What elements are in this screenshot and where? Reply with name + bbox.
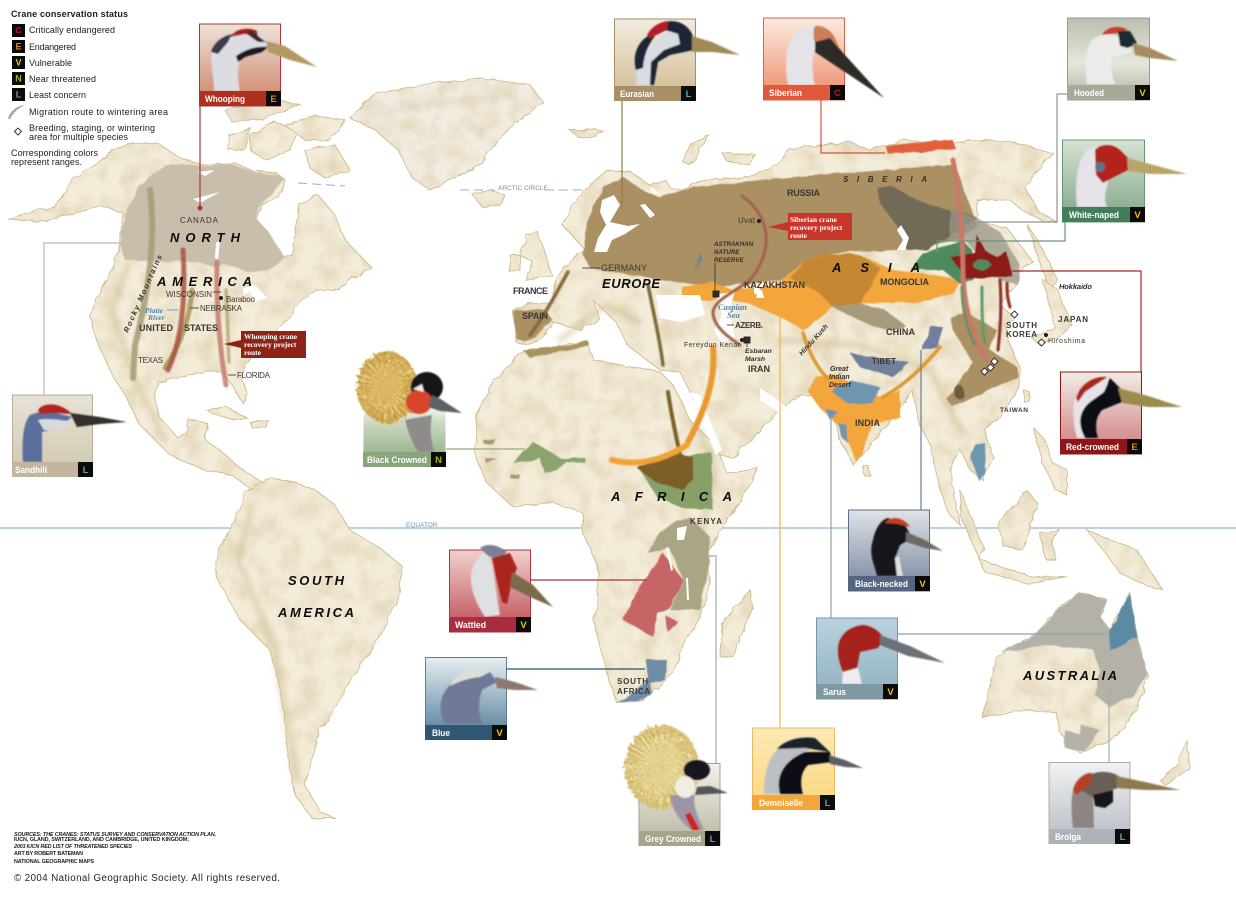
continent: North America: AMERICA [156, 274, 252, 289]
terrain shading [112, 95, 960, 780]
physical labels: Volga [693, 252, 704, 270]
route: white-naped [982, 287, 985, 343]
card: white-naped crane: V [1134, 210, 1141, 221]
card: whooping crane [199, 24, 317, 106]
route: red-crowned Korea [1007, 283, 1010, 307]
range: blue north-east Australia [1110, 593, 1137, 650]
callout: whooping crane recovery project route: recovery project [244, 340, 297, 349]
physical labels: Indian [829, 374, 850, 381]
legend: least concern [12, 88, 86, 101]
physical labels: Esbaran [745, 348, 772, 355]
card: whooping crane: E [270, 94, 277, 105]
country labels: Hokkaido [1059, 282, 1092, 291]
country labels: RUSSIA [787, 188, 820, 198]
range: grey crowned [647, 517, 710, 610]
country labels: CANADA [180, 216, 219, 225]
physical labels [122, 241, 851, 389]
country labels: JAPAN [1058, 315, 1088, 324]
arctic circle line: ARCTIC CIRCLE [498, 185, 549, 192]
country labels: AZERB. [735, 321, 763, 330]
whooping anchor dot [198, 206, 202, 210]
physical labels: NATURE [714, 249, 740, 256]
legend note: represent ranges. [11, 157, 82, 167]
marker: Uvat [757, 219, 761, 223]
Sulawesi [1040, 530, 1060, 560]
place labels [122, 175, 1117, 696]
country labels: Hiroshima [1048, 338, 1085, 345]
range: black crowned east [640, 452, 713, 510]
range: brown mongolia-china [830, 303, 905, 332]
connector: blue [507, 668, 645, 670]
card: black crowned crane: Black Crowned [367, 455, 427, 466]
connector: siberian [821, 100, 885, 153]
card: siberian crane: Siberian [769, 88, 802, 99]
card: wattled crane: Wattled [455, 620, 486, 631]
card: white-naped crane: White-naped [1069, 210, 1119, 221]
card: sandhill crane [12, 395, 127, 477]
Iceland [473, 190, 505, 207]
route: demoiselle west [688, 348, 713, 442]
range: white-naped [910, 240, 975, 284]
range: hooded [877, 187, 977, 250]
callout: siberian crane recovery project route: Siberian crane [790, 215, 838, 224]
card: black-necked crane [848, 510, 943, 591]
route: red-crowned wintering [998, 280, 1001, 350]
card: siberian crane: C [834, 88, 841, 99]
card: grey crowned crane: L [710, 834, 716, 845]
physical labels: Great [830, 366, 849, 373]
country labels: TAIWAN [1000, 407, 1028, 414]
sources [13, 832, 216, 865]
Madagascar [720, 590, 753, 657]
legend: least concern: Least concern [29, 90, 86, 100]
route: eurasian spain [530, 272, 568, 335]
route: demoiselle hindu kush [803, 333, 827, 378]
physical labels: RESERVE [714, 257, 744, 264]
connector: hooded [977, 94, 1067, 222]
country labels: NEBRASKA [200, 304, 243, 313]
connector: demoiselle [779, 315, 781, 728]
range: black crowned small [483, 438, 520, 479]
connector: black crowned [446, 448, 525, 450]
range: red-crowned [950, 235, 1013, 280]
card: hooded crane: Hooded [1074, 88, 1104, 99]
card: brolga [1049, 762, 1180, 844]
range: siberian [885, 140, 955, 153]
range: wattled [623, 553, 683, 637]
card: brolga: L [1120, 832, 1126, 843]
Java [980, 560, 1067, 584]
connector: brolga [1108, 690, 1110, 762]
legend: endangered: Endangered [29, 42, 76, 52]
card: siberian crane [763, 18, 884, 100]
route: hooded east [962, 287, 975, 345]
route: siberian east [953, 160, 987, 360]
country labels: CHINA [886, 327, 916, 337]
range: sarus [832, 380, 880, 403]
legend: vulnerable: Vulnerable [29, 58, 72, 68]
country labels: KOREA [1006, 330, 1037, 339]
card: black crowned crane: N [435, 455, 442, 466]
connector: wattled [531, 579, 647, 581]
physical labels: Platte [145, 306, 164, 315]
country labels: FLORIDA [237, 371, 271, 380]
New Zealand [1160, 740, 1190, 785]
route: whooping wild [168, 250, 184, 370]
marker: Fereydun Kenar [740, 338, 744, 342]
country labels: UNITED [139, 323, 174, 333]
card: blue crane: V [496, 728, 503, 739]
continent: Asia: ASIA [831, 260, 920, 275]
country labels: FRANCE [513, 286, 548, 296]
range: red-crowned centre [973, 260, 991, 270]
card: red-crowned crane [1060, 372, 1182, 454]
route: sandhill central [165, 290, 192, 368]
continent: South America: SOUTH [288, 573, 345, 588]
route: demoiselle east India [883, 347, 940, 397]
Taiwan [1024, 390, 1030, 403]
arctic circle line [298, 183, 585, 192]
Arctic islands [250, 122, 300, 160]
callout: whooping crane recovery project route: route [244, 348, 262, 357]
country labels: WISCONSIN [166, 290, 212, 299]
continent: North America [156, 230, 252, 289]
route: demoiselle africa [612, 445, 687, 463]
card: demoiselle crane [752, 728, 863, 810]
connector: sandhill [44, 243, 122, 394]
card: sarus crane: Sarus [823, 687, 846, 698]
range: black-necked east [922, 327, 943, 350]
Sri Lanka [863, 465, 870, 476]
legend: migration route [8, 105, 168, 119]
card: wattled crane [449, 545, 553, 632]
marker: Esbaran [744, 337, 750, 343]
physical labels: Caspian [718, 302, 747, 312]
connector: white-naped [937, 222, 1065, 253]
card: sandhill crane: L [83, 465, 89, 476]
callout: siberian crane recovery project route [768, 213, 852, 240]
route: sandhill east [226, 290, 229, 362]
country labels: TEXAS [138, 356, 163, 365]
legend: vulnerable [12, 56, 72, 69]
country labels: TIBET [872, 357, 896, 366]
marker: Baraboo [219, 296, 223, 300]
markers [219, 219, 1048, 375]
country labels: KAZAKHSTAN [744, 280, 805, 290]
range: demoiselle overlap [790, 253, 880, 307]
region: Siberia: SIBERIA [843, 175, 927, 184]
card: eurasian crane: L [686, 89, 692, 100]
card: red-crowned crane: E [1131, 442, 1138, 453]
range: brolga south [1065, 725, 1100, 752]
sources: ART BY ROBERT BATEMAN [14, 851, 83, 857]
range: india demoiselle [807, 375, 900, 463]
card: blue crane [425, 658, 538, 740]
connector: sarus north [830, 415, 832, 618]
Greenland [350, 78, 543, 190]
range: demoiselle [682, 253, 960, 330]
card: demoiselle crane: L [825, 798, 831, 809]
Sumatra [960, 490, 983, 560]
sources: 2003 IUCN RED LIST OF THREATENED SPECIES [13, 844, 132, 850]
range: black crowned west [513, 442, 585, 473]
card: sarus crane: V [887, 687, 894, 698]
diamonds: China and Korea [981, 311, 1045, 375]
continent: Africa: AFRICA [610, 489, 732, 504]
callout: siberian crane recovery project route: route [790, 231, 808, 240]
country labels: SOUTH [1006, 321, 1037, 330]
Sakhalin and Japan [1028, 225, 1058, 290]
country labels: AFRICA [617, 687, 650, 696]
legend: near threatened: Near threatened [29, 74, 96, 84]
legend: breeding area: area for multiple species [29, 132, 128, 142]
callout: whooping crane recovery project route: Whooping crane [244, 332, 298, 341]
legend: breeding area: Breeding, staging, or wintering [29, 123, 155, 133]
card: sarus crane [816, 618, 945, 699]
legend: near threatened: N [15, 74, 22, 84]
range: brolga [1000, 593, 1148, 707]
continent: Europe: EUROPE [602, 276, 660, 291]
physical labels: Hindu Kush [798, 323, 830, 357]
physical labels: ASTRAKHAN [713, 241, 754, 248]
continent: Australia: AUSTRALIA [1022, 668, 1117, 683]
physical labels: River [147, 313, 165, 322]
seas and lakes [193, 170, 909, 600]
callout: whooping crane recovery project route [224, 331, 306, 358]
legend: least concern: L [16, 90, 22, 100]
legend [8, 9, 168, 167]
physical labels: Sea [727, 310, 740, 320]
land masses [8, 78, 1190, 818]
migration routes [133, 160, 1010, 468]
card: hooded crane: V [1139, 88, 1146, 99]
Philippines [1033, 427, 1067, 495]
card: black-necked crane: Black-necked [855, 579, 908, 590]
card: blue crane: Blue [432, 728, 450, 739]
range: sarus vietnam [970, 443, 986, 482]
connector: sarus east [898, 633, 1107, 635]
legend: vulnerable: V [15, 58, 22, 68]
South America [215, 478, 403, 818]
marker: Hiroshima [1044, 333, 1048, 337]
legend: breeding area [14, 123, 155, 142]
continent: North America: NORTH [170, 230, 241, 245]
continent: South America [277, 573, 354, 620]
range: eurasian North Africa [523, 340, 590, 358]
legend: critically endangered [12, 24, 115, 37]
country labels: KENYA [690, 517, 722, 526]
range: dark patch China [954, 385, 964, 399]
legend: critically endangered: Critically endangered [29, 25, 115, 35]
Cuba and Caribbean [207, 406, 247, 420]
card: grey crowned crane [625, 725, 728, 846]
Borneo [998, 490, 1037, 550]
range: eurasian Spain [513, 310, 553, 342]
country labels: GERMANY [601, 263, 647, 273]
route: siberian west [713, 196, 766, 345]
card: red-crowned crane: Red-crowned [1066, 442, 1119, 453]
country labels: MONGOLIA [880, 277, 930, 287]
range: sandhill [120, 165, 285, 272]
UK and Ireland [520, 232, 552, 280]
card: hooded crane [1067, 18, 1178, 100]
route: whooping project [217, 262, 226, 385]
card: eurasian crane [614, 19, 740, 101]
country labels: Uvat [738, 216, 756, 225]
route: sandhill west [133, 190, 152, 378]
Svalbard and Arctic Russia islands [570, 130, 602, 138]
Australia [982, 593, 1148, 753]
range: hooded wintering [950, 210, 1020, 285]
route: eurasian africa south [668, 392, 683, 468]
sources: IUCN, GLAND, SWITZERLAND, AND CAMBRIDGE, UNITED KINGDOM; [14, 837, 189, 843]
card: black-necked crane: V [919, 579, 926, 590]
Africa [475, 342, 757, 703]
country labels: SPAIN [522, 311, 548, 321]
legend: near threatened [12, 72, 96, 85]
range: blue [618, 660, 667, 703]
New Guinea [1087, 530, 1163, 590]
connector: black-necked [920, 350, 922, 510]
connector: red-crowned [1012, 271, 1141, 372]
legend note: Corresponding colors [11, 148, 98, 158]
North America [8, 143, 372, 490]
card: sandhill crane: Sandhill [15, 465, 47, 476]
country labels: INDIA [855, 418, 880, 428]
range: sarus west [825, 408, 848, 443]
connector: grey crowned [705, 556, 716, 764]
connector: eurasian [621, 100, 623, 208]
card: white-naped crane [1062, 140, 1187, 222]
card: whooping crane: Whooping [205, 94, 245, 105]
legend note [11, 148, 98, 167]
sources: SOURCES: THE CRANES: STATUS SURVEY AND CONSERVATION ACTION PLAN, [14, 832, 216, 838]
card: eurasian crane: Eurasian [620, 89, 654, 100]
crane ranges [120, 140, 1148, 752]
legend: endangered [12, 40, 76, 53]
country labels: Baraboo [226, 295, 256, 304]
card: grey crowned crane: Grey Crowned [645, 834, 701, 845]
physical labels: Desert [829, 382, 851, 389]
copyright: © 2004 National Geographic Society. All rights reserved. [14, 873, 280, 884]
country labels: STATES [184, 323, 218, 333]
legend title: Crane conservation status [11, 9, 128, 19]
Eurasia [513, 140, 1057, 525]
range: black-necked Tibet [850, 353, 910, 377]
range: wattled south [665, 615, 678, 632]
physical labels: Rocky Mountains [122, 253, 164, 334]
country labels [138, 188, 1092, 696]
physical labels: Marsh [745, 356, 765, 363]
connector: whooping [199, 106, 201, 208]
route: eurasian africa [648, 285, 663, 365]
callout: siberian crane recovery project route: recovery project [790, 223, 843, 232]
leader lines for labels [167, 263, 747, 375]
legend: migration route: Migration route to wintering area [29, 107, 168, 117]
range: eurasian [583, 165, 977, 287]
country labels: SOUTH [617, 677, 648, 686]
legend: endangered: E [15, 42, 22, 52]
marker: Astrakhan [713, 291, 719, 297]
continent: South America: AMERICA [277, 605, 354, 620]
connector lines [44, 94, 1141, 764]
equator line: EQUATOR [406, 522, 438, 529]
card: black crowned crane [357, 351, 462, 467]
card: wattled crane: V [520, 620, 527, 631]
range: grey crowned north overlap [637, 453, 693, 490]
sources: NATIONAL GEOGRAPHIC MAPS [14, 859, 94, 865]
country labels: Fereydun Kenar [684, 342, 741, 349]
legend: critically endangered: C [15, 26, 22, 36]
country labels: IRAN [748, 364, 770, 374]
card: brolga: Brolga [1055, 832, 1082, 843]
card: demoiselle crane: Demoiselle [759, 798, 803, 809]
range: wintering China [947, 313, 1017, 407]
